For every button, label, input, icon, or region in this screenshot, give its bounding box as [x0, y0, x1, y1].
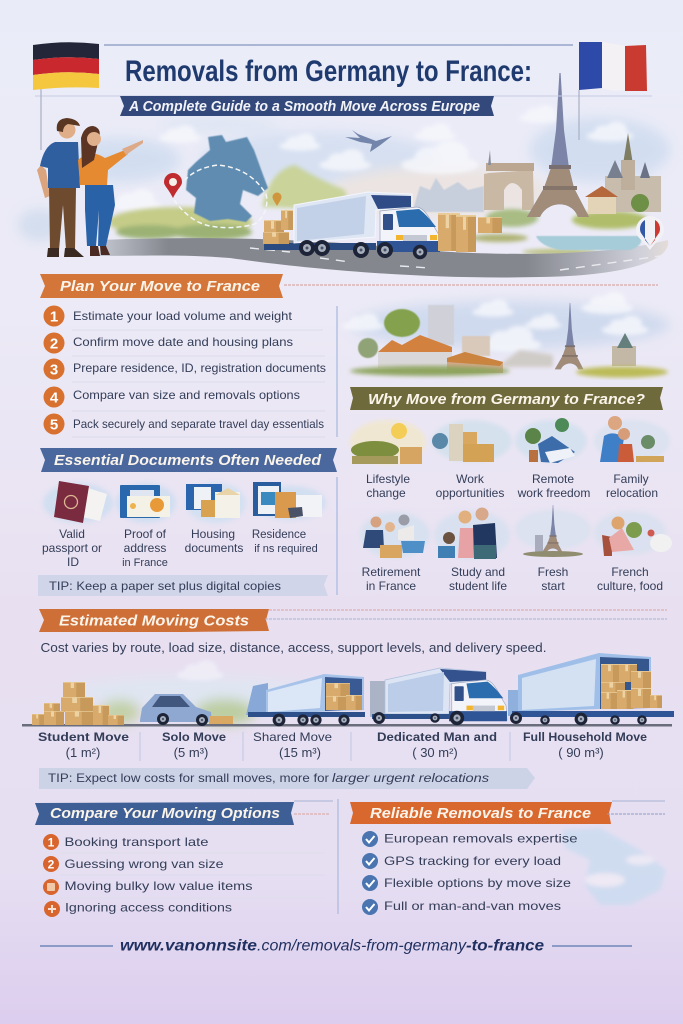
chateau — [585, 133, 661, 214]
cost tier labels: Full Household Move — [523, 730, 647, 744]
item 3 — [43, 879, 252, 895]
step 2 — [44, 332, 293, 354]
hills and foliage — [108, 165, 648, 255]
step 2: 2 — [50, 336, 58, 352]
title: Removals from Germany to France: — [125, 55, 532, 88]
document labels: documents — [185, 541, 243, 555]
ribbon: Plan Your Move to France: Plan Your Move to France — [60, 278, 260, 295]
dashed route — [174, 165, 267, 228]
truck: shared move — [246, 674, 365, 726]
item 1: Booking transport late — [64, 835, 209, 849]
step 3 — [44, 358, 326, 380]
reason labels row 2: in France — [366, 579, 416, 593]
document labels: ID — [67, 555, 79, 569]
reason labels row 2: Fresh — [538, 565, 568, 579]
document labels: address — [124, 541, 166, 555]
document icons — [43, 481, 326, 523]
benefit 2: GPS tracking for every load — [384, 854, 561, 868]
ribbon: Compare Your Moving Options — [35, 802, 294, 825]
icon: lifestyle change — [350, 420, 426, 464]
tip: costs: TIP: Expect low costs for small moves, more for — [48, 771, 329, 785]
reason labels row 2: culture, food — [597, 579, 663, 593]
section: Reliable Removals — [350, 801, 666, 915]
step 4: Compare van size and removals options — [73, 388, 300, 402]
ribbon: Why Move from Germany to France? — [350, 387, 663, 410]
reason labels row 2: student life — [449, 579, 507, 593]
map pin: orange — [272, 192, 282, 206]
step 5 — [44, 414, 324, 434]
couple pointing — [37, 118, 143, 257]
section: Estimated Moving Costs — [22, 609, 674, 789]
woman — [78, 126, 143, 256]
river — [536, 236, 641, 250]
map pin: France — [636, 216, 664, 250]
cost tier labels: ( 30 m²) — [412, 745, 458, 760]
ribbon: Essential Documents — [40, 448, 337, 472]
cost tier labels: Shared Move — [253, 730, 332, 744]
flag: Germany — [33, 42, 99, 150]
truck: dedicated man and van — [370, 668, 507, 725]
icon: passport — [54, 481, 107, 523]
icon: study and student life — [434, 508, 510, 559]
ribbon: Plan Your Move to France — [40, 274, 283, 298]
icon: family relocation — [594, 416, 670, 462]
flag: France — [579, 42, 647, 140]
cost tier labels: ( 90 m³) — [558, 745, 604, 760]
road — [100, 238, 668, 277]
reason labels row 1: relocation — [606, 486, 658, 500]
benefit 1: European removals expertise — [384, 832, 578, 846]
benefit 2 — [362, 853, 561, 869]
moving truck — [263, 192, 502, 259]
icon: proof of address — [120, 485, 170, 518]
Eiffel Tower — [527, 73, 589, 217]
benefit 3: Flexible options by move size — [384, 876, 571, 890]
cost tier labels: (1 m²) — [66, 745, 100, 760]
benefit 1 — [362, 831, 578, 847]
boxes: student move — [32, 682, 124, 725]
cost tier labels — [38, 730, 647, 760]
item 1: 1 — [48, 836, 55, 850]
ribbon: Reliable Removals to France — [350, 802, 612, 824]
footer URL: www.vanonnsite — [120, 938, 257, 954]
footer URL: .com/removals-from-germany — [257, 938, 467, 954]
step 3: 3 — [50, 362, 58, 378]
document labels: Valid — [59, 527, 85, 541]
reason labels row 1: Remote — [532, 472, 574, 486]
step 4: 4 — [50, 390, 59, 406]
benefit 4 — [362, 899, 561, 915]
section: Essential Documents — [38, 448, 337, 596]
item 3: Moving bulky low value items — [64, 879, 252, 893]
man — [37, 118, 84, 257]
reason labels row 1: Family — [613, 472, 649, 486]
footer URL — [40, 938, 632, 954]
icon: work opportunities — [432, 420, 512, 462]
item 1 — [43, 834, 209, 850]
icon: fresh start — [515, 505, 591, 557]
document labels: if ns required — [254, 543, 318, 555]
document labels: Residence — [252, 529, 306, 541]
ribbon: Compare Your Moving Options: Compare Your Moving Options — [50, 805, 280, 822]
ribbon: Reliable Removals to France: Reliable Removals to France — [370, 805, 591, 822]
item 2 — [43, 856, 224, 872]
benefit 4: Full or man-and-van moves — [384, 899, 561, 913]
document labels: Proof of — [124, 527, 167, 541]
boxes beside truck — [263, 210, 502, 252]
distant skyline — [414, 178, 484, 212]
reason labels row 1: opportunities — [436, 486, 504, 500]
tip: paper set: TIP: Keep a paper set plus digital copies — [49, 579, 281, 593]
document labels: in France — [122, 557, 168, 569]
cost tier labels: Solo Move — [162, 730, 226, 744]
vehicles scene — [22, 653, 674, 726]
step 3: Prepare residence, ID, registration documents — [73, 361, 326, 375]
icon: retirement in France — [360, 512, 430, 558]
icon: French culture, food — [594, 511, 672, 556]
ribbon: Estimated Moving Costs: Estimated Moving Costs — [59, 612, 249, 630]
cost tier labels: Student Move — [38, 730, 129, 744]
document labels: passport or — [42, 541, 102, 555]
tip: paper set — [38, 575, 328, 596]
step 2: Confirm move date and housing plans — [73, 335, 293, 349]
sky and clouds — [18, 105, 670, 241]
step 1: 1 — [50, 308, 58, 326]
tip: costs: larger urgent relocations — [332, 771, 489, 785]
reason labels row 1 — [366, 472, 658, 500]
step 1: Estimate your load volume and weight — [73, 309, 293, 323]
step 5: 5 — [50, 416, 58, 434]
tip: costs — [39, 768, 535, 789]
hero illustration — [18, 73, 670, 277]
arch monument — [484, 150, 534, 210]
reason labels row 2: Retirement — [362, 565, 421, 579]
header — [33, 42, 652, 150]
reason labels row 2: Study and — [451, 565, 505, 579]
footer URL: -to-france — [466, 938, 544, 954]
step 1 — [44, 306, 293, 326]
section: Compare Your Moving Options — [35, 801, 333, 917]
icon: housing documents — [186, 484, 240, 518]
car: solo move — [140, 694, 233, 726]
reason labels row 1: Lifestyle — [366, 472, 410, 486]
reason labels row 1: Work — [456, 472, 485, 486]
reason labels row 2: French — [611, 565, 649, 579]
item 2: 2 — [48, 858, 55, 872]
section: Why Move — [350, 387, 672, 593]
section: Plan Your Move — [40, 274, 658, 437]
reason labels row 1: change — [366, 486, 406, 500]
document labels — [42, 527, 318, 569]
item 4: Ignoring access conditions — [65, 900, 232, 914]
map watermark — [562, 828, 666, 905]
reason labels row 2: start — [541, 579, 565, 593]
ribbon: Estimated Moving Costs — [39, 609, 269, 632]
document labels: Housing — [191, 527, 235, 541]
step 4 — [44, 386, 300, 408]
plane — [345, 130, 392, 152]
reason labels row 1: work freedom — [517, 486, 590, 500]
item 2: Guessing wrong van size — [64, 857, 224, 871]
ribbon: Why Move from Germany to France?: Why Move from Germany to France? — [368, 391, 645, 408]
reason labels row 2 — [362, 565, 663, 593]
cost intro text: Cost varies by route, load size, distance, access, support levels, and delivery speed. — [40, 641, 546, 655]
right landscape illustration — [342, 292, 670, 378]
subtitle ribbon: A Complete Guide to a Smooth Move Across Europe — [128, 99, 480, 115]
map of Germany — [186, 135, 268, 222]
ribbon: Essential Documents: Essential Documents Often Needed — [54, 452, 322, 469]
icon: residence documents — [253, 482, 322, 518]
cost tier labels: Dedicated Man and — [377, 730, 497, 744]
truck: full household — [508, 653, 674, 725]
icon: remote work freedom — [515, 418, 587, 463]
item 4 — [44, 900, 232, 917]
step 5: Pack securely and separate travel day essentials — [73, 417, 324, 431]
benefit 3 — [362, 875, 571, 891]
cost tier labels: (5 m³) — [174, 745, 208, 760]
map pin: red — [164, 173, 182, 198]
cost tier labels: (15 m³) — [279, 745, 321, 760]
